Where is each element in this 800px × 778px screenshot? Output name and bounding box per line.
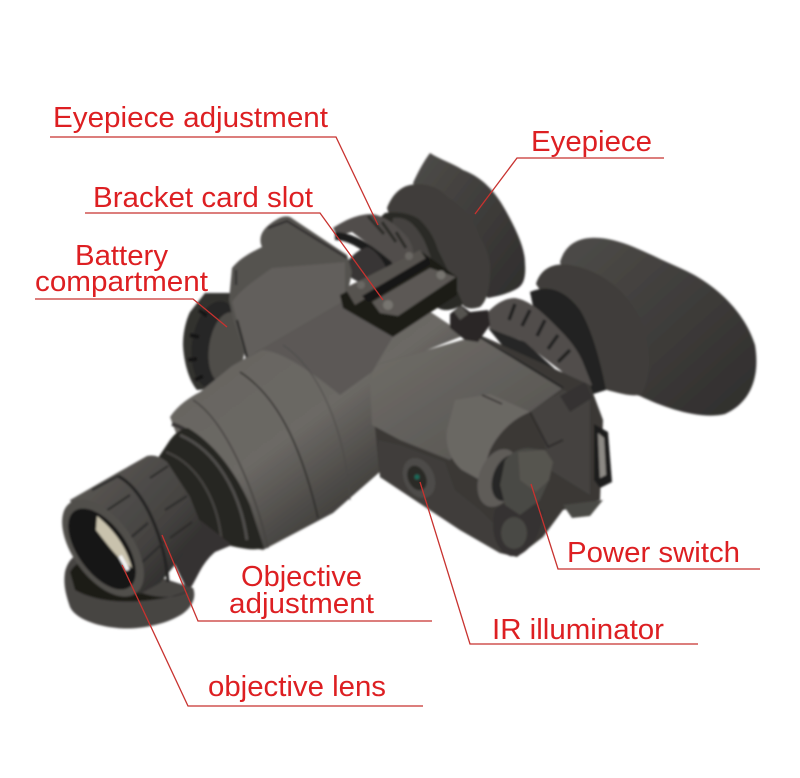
callout: bracket card slot <box>85 182 383 300</box>
side bracket loop <box>594 424 612 488</box>
small locking knob <box>450 305 490 342</box>
callout: bracket card slot: Bracket card slot <box>93 182 313 214</box>
lower housing details <box>493 500 603 556</box>
lens cap and strap <box>64 520 232 629</box>
rear eyepiece <box>372 153 525 310</box>
callout: objective lens <box>122 565 423 706</box>
callout: eyepiece: Eyepiece <box>531 126 652 158</box>
callout: IR illuminator <box>420 482 698 646</box>
right adjustment knob <box>486 298 592 392</box>
right housing <box>370 335 603 557</box>
objective lens glass <box>46 485 160 611</box>
objective neck <box>150 428 264 555</box>
callout: IR illuminator: IR illuminator <box>492 614 664 646</box>
callout: power switch <box>531 484 760 569</box>
central barrel <box>170 300 465 550</box>
callout: objective lens: objective lens <box>208 671 386 703</box>
bracket card slot rail <box>340 250 457 337</box>
callout: battery compartment: compartment <box>35 266 208 298</box>
callout: objective adjustment: adjustment <box>229 588 374 620</box>
battery compartment knob <box>183 293 250 392</box>
callout: objective adjustment: Objective <box>241 561 362 593</box>
device photo <box>46 153 756 629</box>
rear adjustment knob <box>333 214 413 284</box>
callout: battery compartment <box>35 240 227 327</box>
callout: power switch: Power switch <box>567 537 740 569</box>
callout: eyepiece adjustment: Eyepiece adjustment <box>53 102 328 134</box>
callout: eyepiece <box>475 126 664 214</box>
power switch knob <box>470 443 553 515</box>
IR illuminator <box>397 453 441 503</box>
callout: objective adjustment <box>162 535 432 621</box>
callout: eyepiece adjustment <box>50 102 378 225</box>
callout: battery compartment: Battery <box>75 240 169 272</box>
right eyepiece <box>530 238 756 416</box>
rear housing <box>229 216 352 362</box>
objective knob <box>70 455 202 594</box>
